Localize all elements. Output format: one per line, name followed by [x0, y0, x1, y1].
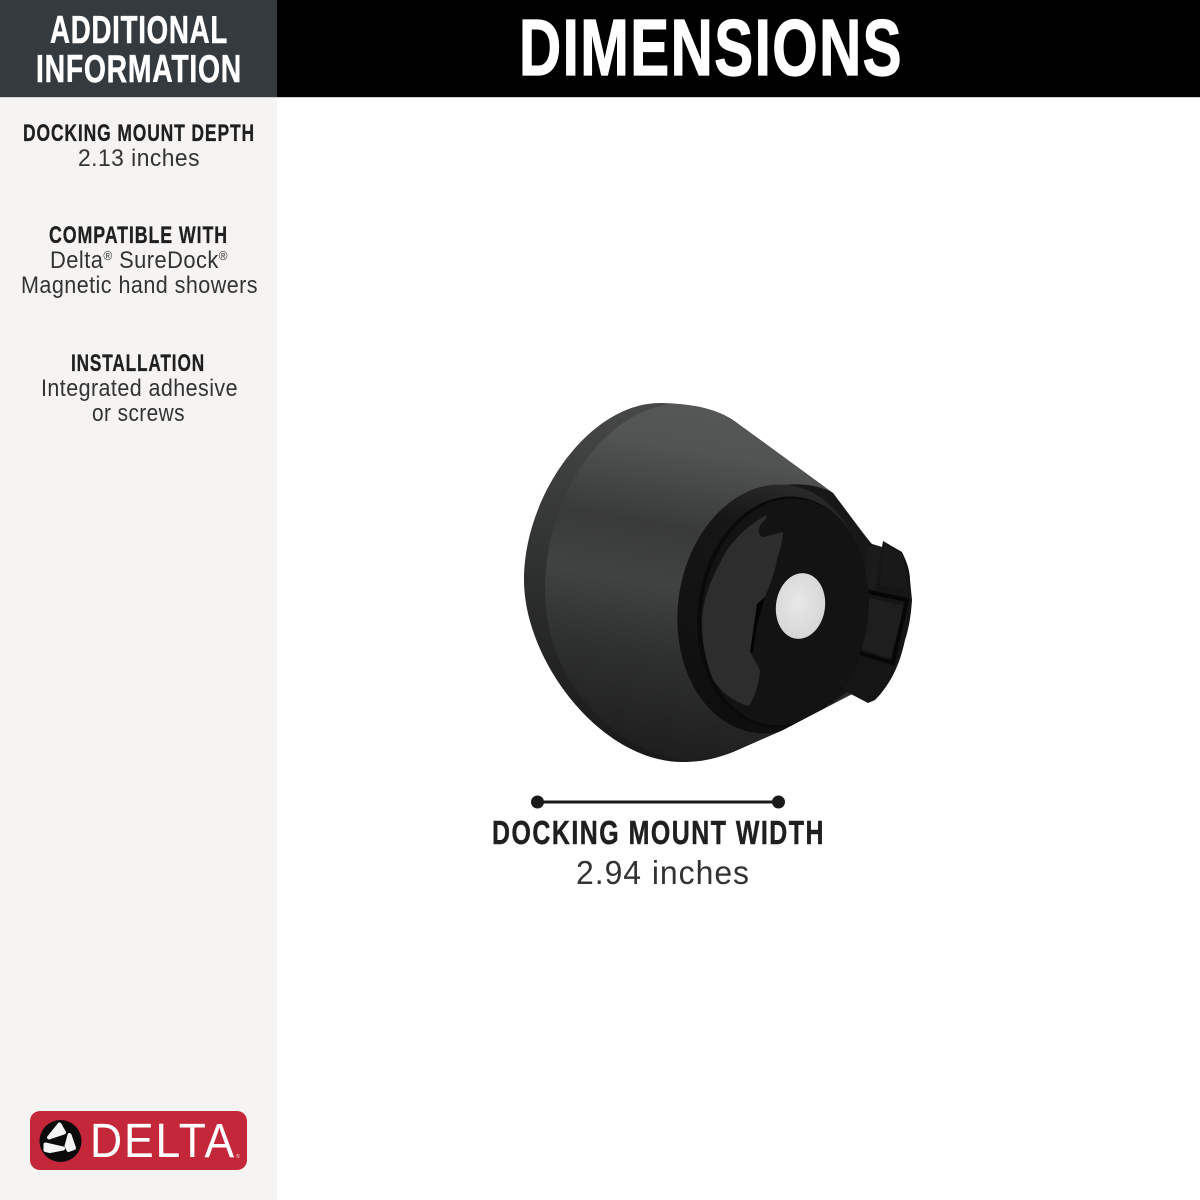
info block: installation: or screws — [92, 400, 185, 427]
info block: compatible with: Magnetic hand showers — [21, 272, 258, 299]
magnet — [772, 570, 829, 642]
header: dimensions title: DIMENSIONS — [519, 3, 903, 92]
info block: installation — [41, 350, 238, 427]
logo: Delta — [30, 1111, 247, 1170]
black ring — [677, 484, 848, 734]
product image: docking mount — [524, 403, 912, 762]
logo mark — [40, 1120, 82, 1162]
clip detail lines — [843, 589, 907, 663]
info block: docking mount depth: 2.13 inches — [78, 145, 200, 172]
header: dimensions title — [277, 0, 1200, 97]
clip facets — [856, 545, 882, 590]
info block: installation: Integrated adhesive — [41, 375, 238, 402]
ring and plate — [677, 484, 869, 734]
info block: compatible with: Delta — [50, 247, 109, 274]
info block: compatible with: SureDock — [113, 247, 219, 274]
header: additional information — [0, 0, 277, 97]
ring shoulder — [785, 484, 868, 600]
info block: docking mount depth — [23, 120, 255, 172]
grey crescent — [702, 515, 783, 706]
outer cone silhouette — [524, 403, 870, 762]
header: additional information: ADDITIONAL — [50, 9, 228, 52]
info block: compatible with: COMPATIBLE WITH — [49, 222, 228, 249]
label: docking mount width: 2.94 inches — [576, 854, 750, 891]
info block: compatible with: ® — [103, 248, 113, 263]
front plate — [702, 498, 868, 726]
info block: docking mount depth: DOCKING MOUNT DEPTH — [23, 120, 255, 147]
header: additional information: INFORMATION — [36, 48, 242, 91]
info block: installation: INSTALLATION — [71, 350, 205, 377]
logo: Delta: DELTA — [90, 1115, 236, 1168]
label: docking mount width — [492, 814, 825, 891]
clip at the front — [830, 520, 912, 705]
dimension line: width — [531, 796, 785, 808]
dark separation line — [698, 496, 854, 726]
label: docking mount width: DOCKING MOUNT WIDTH — [492, 814, 825, 851]
sidebar panel — [0, 97, 277, 1200]
logo: Delta: ® — [236, 1153, 240, 1160]
slot — [750, 597, 765, 652]
cone face — [545, 404, 870, 761]
info block: compatible with — [21, 222, 258, 299]
info block: compatible with: ® — [219, 248, 228, 263]
